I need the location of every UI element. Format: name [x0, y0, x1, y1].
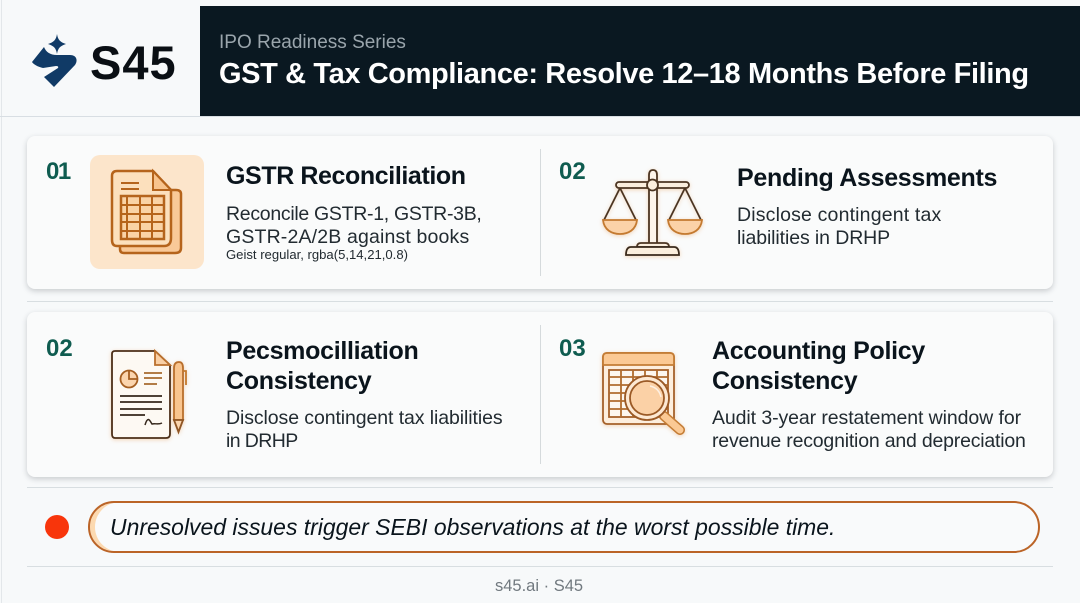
- wordmark: S45: [90, 36, 177, 88]
- footer divider: [27, 566, 1053, 567]
- item 02 heading: Pending Assessments: [737, 164, 997, 192]
- item 01 body: [226, 203, 482, 248]
- item 02 number: 02: [559, 158, 586, 185]
- item 04 body: revenue recognition and depreciation: [712, 430, 1026, 452]
- page edge line: [1, 0, 2, 603]
- top row divider: [540, 149, 541, 276]
- item 02 body: Disclose contingent tax: [737, 204, 941, 226]
- title: GST & Tax Compliance: Resolve 12–18 Months Before Filing: [219, 58, 1029, 90]
- item 03 body: [226, 407, 502, 452]
- callout: [88, 501, 1040, 553]
- item 04 heading: [712, 337, 926, 395]
- alert dot: [45, 515, 69, 539]
- icon: S45 mark: [32, 34, 77, 87]
- item 04 heading: Accounting Policy: [712, 337, 925, 365]
- item 01 body: GSTR-2A/2B against books: [226, 226, 469, 248]
- item 01 note: Geist regular, rgba(5,14,21,0.8): [226, 247, 408, 262]
- bottom row divider: [540, 325, 541, 464]
- item 04 body: Audit 3-year restatement window for: [712, 407, 1021, 429]
- item 02 body: liabilities in DRHP: [737, 227, 890, 249]
- item 04 number: 03: [559, 335, 586, 362]
- item 03 body: Disclose contingent tax liabilities: [226, 407, 502, 429]
- item 03 number: 02: [46, 335, 73, 362]
- icon: table and magnifier: [600, 350, 687, 438]
- item 04 body: [712, 407, 1026, 452]
- header divider: [0, 116, 1080, 117]
- item 03 heading: [226, 337, 418, 395]
- item 01 heading: GSTR Reconciliation: [226, 162, 466, 190]
- callout divider: [27, 487, 1053, 488]
- item 03 heading: Consistency: [226, 367, 371, 395]
- item 04 heading: Consistency: [712, 367, 857, 395]
- callout text: Unresolved issues trigger SEBI observations at the worst possible time.: [110, 514, 835, 540]
- row divider: [27, 301, 1053, 302]
- panel: top row: [27, 136, 1053, 289]
- item 03 body: in DRHP: [226, 430, 298, 452]
- item 01 number: 01: [46, 158, 70, 185]
- icon: scales: [600, 168, 705, 260]
- panel: bottom row: [27, 312, 1053, 477]
- item 02 body: [737, 204, 941, 249]
- icon: spreadsheet documents: [90, 155, 204, 269]
- item 03 heading: Pecsmocilliation: [226, 337, 418, 365]
- series label: IPO Readiness Series: [219, 32, 406, 53]
- logo: [32, 34, 177, 88]
- header banner: [200, 6, 1080, 116]
- item 01 body: Reconcile GSTR-1, GSTR-3B,: [226, 203, 482, 225]
- footer: s45.ai · S45: [495, 577, 583, 595]
- icon: report and pen: [108, 348, 189, 442]
